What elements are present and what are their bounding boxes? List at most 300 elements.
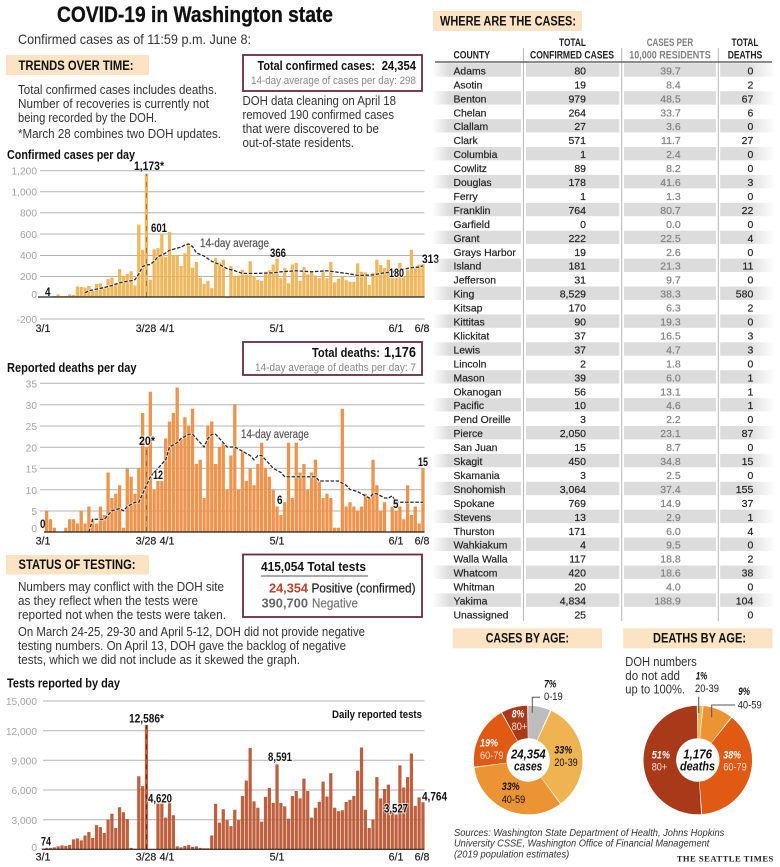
table rows: 0 bbox=[747, 414, 753, 426]
bar chart: tests reported by day: 12,000 bbox=[6, 727, 37, 738]
table rows: Adams bbox=[454, 66, 486, 77]
table rows: Wahkiakum bbox=[454, 541, 507, 552]
table rows: 1 bbox=[747, 386, 753, 398]
table rows: 171 bbox=[568, 526, 586, 538]
table rows: 21.3 bbox=[660, 261, 681, 273]
table rows: 104 bbox=[736, 596, 753, 608]
bar chart: confirmed cases per day: 14-day average bbox=[200, 238, 269, 250]
bar chart: reported deaths per day: 35 bbox=[26, 380, 37, 390]
table header bbox=[454, 37, 762, 61]
table rows: 37 bbox=[574, 330, 586, 342]
table rows: Grays Harbor bbox=[454, 248, 516, 259]
table rows: 3 bbox=[580, 470, 586, 482]
table rows: 170 bbox=[568, 303, 586, 315]
bar chart: confirmed cases per day: 0 bbox=[31, 290, 37, 301]
table rows: 2.9 bbox=[666, 512, 681, 524]
table rows: 0 bbox=[747, 121, 753, 133]
subtitle: Confirmed cases as of 11:59 p.m. June 8: bbox=[18, 31, 251, 47]
bar chart: confirmed cases per day: 4 bbox=[45, 287, 51, 299]
table rows: 4.6 bbox=[666, 400, 681, 412]
callout: total confirmed cases: 24,354 bbox=[382, 58, 417, 73]
table rows: Benton bbox=[454, 94, 487, 105]
text block: testing notes: reported not when the tests were taken. bbox=[18, 608, 226, 622]
table rows: 6.0 bbox=[666, 372, 681, 384]
text block: testing notes: as they reflect when the tests were bbox=[18, 594, 198, 608]
bar chart: confirmed cases per day: 3/1 bbox=[36, 323, 50, 335]
table rows: 33.7 bbox=[660, 107, 681, 119]
bar chart: confirmed cases per day: 3/28 bbox=[136, 323, 156, 335]
table: cases by county bbox=[432, 37, 775, 621]
table rows: 48.5 bbox=[660, 93, 681, 105]
bar chart: tests reported by day: Daily reported tests bbox=[332, 709, 422, 721]
sources: Sources: Washington State Department of Health, Johns Hopkins bbox=[454, 827, 725, 839]
text block: trends notes: *March 28 combines two DOH updates. bbox=[18, 127, 221, 141]
title: COVID-19 in Washington state bbox=[57, 2, 333, 27]
table rows: 19 bbox=[574, 247, 586, 259]
bar chart: tests reported by day: 3,527 bbox=[384, 804, 408, 816]
table rows: 37 bbox=[574, 344, 586, 356]
table rows: 41.6 bbox=[660, 177, 681, 189]
bar chart: tests reported by day: 6/8 bbox=[415, 852, 429, 864]
table rows: Kittitas bbox=[454, 318, 485, 328]
bar chart: reported deaths per day: 0 bbox=[31, 524, 37, 535]
table rows: 1 bbox=[747, 400, 753, 412]
table rows: 11.7 bbox=[661, 135, 681, 147]
table rows: 1.8 bbox=[666, 358, 681, 370]
table rows: Kitsap bbox=[454, 304, 483, 315]
text block: DOH data cleaning note: out-of-state residents. bbox=[242, 136, 354, 150]
bar chart: reported deaths per day: 20* bbox=[139, 436, 155, 448]
table rows: 1.3 bbox=[666, 191, 681, 203]
table rows: 188.9 bbox=[654, 596, 681, 608]
callout: total deaths: 1,176 bbox=[384, 344, 416, 361]
bar chart: confirmed cases per day: 313 bbox=[422, 254, 439, 266]
bar chart: reported deaths per day: 3/28 bbox=[136, 536, 156, 548]
table rows: Spokane bbox=[454, 499, 495, 510]
text block: trends notes: Number of recoveries is currently not bbox=[18, 97, 209, 111]
donut chart: cases by age: 80+ bbox=[512, 721, 527, 733]
bar chart: confirmed cases per day: 800 bbox=[20, 208, 37, 220]
bar chart: reported deaths per day: 0 bbox=[40, 519, 46, 531]
table rows: 34.8 bbox=[660, 456, 681, 468]
text block: DOH data cleaning note bbox=[242, 94, 396, 150]
table rows: 90 bbox=[574, 316, 586, 328]
table rows: 9.7 bbox=[666, 275, 681, 287]
bar chart: confirmed cases per day: 6/1 bbox=[389, 323, 403, 335]
sources: (2019 population estimates) bbox=[454, 848, 569, 860]
table rows: 39 bbox=[574, 372, 586, 384]
section heading: where are the cases: WHERE ARE THE CASES: bbox=[440, 14, 576, 29]
table rows: 0 bbox=[747, 65, 753, 77]
bar chart: confirmed cases per day: 601 bbox=[151, 223, 168, 235]
table rows: 0.0 bbox=[666, 219, 681, 231]
table rows: 0 bbox=[747, 358, 753, 370]
donut chart: deaths by age: 80+ bbox=[652, 762, 667, 774]
donut chart: deaths by age: 9% bbox=[738, 686, 750, 698]
section heading: status of testing: STATUS OF TESTING: bbox=[18, 557, 136, 572]
text block: trends notes: Total confirmed cases includes deaths. bbox=[18, 83, 217, 97]
table rows: 2 bbox=[747, 303, 753, 315]
bar chart: tests reported by day: 5/1 bbox=[270, 852, 284, 864]
table rows: 37 bbox=[742, 498, 753, 510]
donut chart: deaths by age bbox=[652, 670, 762, 798]
bar chart: reported deaths per day: 6/8 bbox=[415, 536, 429, 548]
bar chart: confirmed cases per day: 5/1 bbox=[270, 323, 284, 335]
text block: DOH numbers note: DOH numbers bbox=[625, 655, 697, 669]
donut chart: cases by age: 20-39 bbox=[554, 757, 578, 769]
bar chart: reported deaths per day: 20 bbox=[26, 444, 37, 454]
table rows: 13.1 bbox=[660, 386, 681, 398]
callout: total deaths: 14-day average of deaths per day: 7 bbox=[255, 362, 416, 374]
callout: total deaths bbox=[243, 342, 422, 375]
table rows: 3 bbox=[747, 330, 753, 342]
table rows: 222 bbox=[568, 233, 586, 245]
table rows: King bbox=[454, 290, 475, 301]
table rows: 4 bbox=[580, 540, 586, 552]
table rows: 1 bbox=[747, 372, 753, 384]
bar chart: tests reported by day: 6,000 bbox=[12, 786, 37, 797]
bar chart: tests reported by day: 15,000 bbox=[6, 697, 37, 708]
bar chart: reported deaths per day: 12 bbox=[153, 470, 163, 482]
sources bbox=[454, 827, 725, 860]
table rows: 420 bbox=[568, 568, 586, 580]
table rows: 3 bbox=[580, 414, 586, 426]
donut chart: cases by age bbox=[480, 679, 578, 806]
callout: total confirmed cases: Total confirmed cases: bbox=[258, 58, 375, 73]
callout: total confirmed cases: 14-day average of cases per day: 298 bbox=[251, 75, 416, 87]
bar chart: tests reported by day: 6/1 bbox=[389, 852, 403, 864]
section heading: trends over time bbox=[6, 55, 149, 75]
donut chart: deaths by age: 1,176 bbox=[683, 746, 713, 761]
bar chart: tests reported by day: 3/1 bbox=[36, 852, 50, 864]
table rows: 87 bbox=[742, 428, 753, 440]
bar chart: reported deaths per day: 4/1 bbox=[160, 536, 174, 548]
bar chart: confirmed cases per day: 180 bbox=[389, 268, 404, 280]
donut chart: cases by age: 24,354 bbox=[510, 746, 546, 761]
table rows: 450 bbox=[568, 456, 586, 468]
table rows bbox=[454, 65, 753, 621]
table rows: Stevens bbox=[454, 513, 491, 524]
text block: testing notes: On March 24-25, 29-30 and April 5-12, DOH did not provide negative bbox=[18, 625, 365, 639]
table rows: Columbia bbox=[454, 150, 498, 161]
callout: testing totals: 415,054 Total tests bbox=[261, 559, 366, 574]
bar chart: reported deaths per day: 5 bbox=[31, 507, 37, 518]
table rows: 18.6 bbox=[660, 568, 681, 580]
bar chart: confirmed cases per day: 4/1 bbox=[160, 323, 174, 335]
table rows: 769 bbox=[568, 498, 586, 510]
table rows: 3.6 bbox=[666, 121, 681, 133]
section heading: cases by age: CASES BY AGE: bbox=[486, 631, 569, 646]
table rows: Cowlitz bbox=[454, 164, 487, 175]
table header: TOTAL bbox=[559, 37, 586, 49]
text block: trends notes bbox=[18, 83, 221, 141]
bar chart: reported deaths per day bbox=[26, 380, 429, 548]
donut chart: cases by age: cases bbox=[514, 758, 542, 774]
bar chart: tests reported by day: 74 bbox=[41, 837, 51, 849]
bar chart: reported deaths per day: 6/1 bbox=[389, 536, 403, 548]
table rows: 31 bbox=[574, 275, 586, 287]
table rows: 571 bbox=[568, 135, 586, 147]
table rows: 0 bbox=[747, 582, 753, 594]
table rows: 10 bbox=[574, 400, 586, 412]
table rows: 8,529 bbox=[560, 289, 586, 301]
donut chart: deaths by age: 51% bbox=[652, 749, 670, 761]
table rows: Snohomish bbox=[454, 485, 506, 496]
table rows: Island bbox=[454, 262, 481, 273]
bar chart: confirmed cases per day: -200 bbox=[17, 315, 37, 326]
table rows: 2.2 bbox=[666, 414, 681, 426]
table rows: 38.3 bbox=[660, 289, 681, 301]
table rows: 18.8 bbox=[660, 554, 681, 566]
section heading: deaths by age bbox=[623, 628, 772, 648]
table rows: 0 bbox=[580, 219, 586, 231]
table rows: Pierce bbox=[454, 429, 483, 440]
table header: DEATHS bbox=[728, 49, 762, 61]
table rows: 2.4 bbox=[666, 149, 681, 161]
donut chart: cases by age: 19% bbox=[480, 738, 498, 750]
table rows: 2.5 bbox=[666, 470, 681, 482]
table rows: 20 bbox=[574, 582, 586, 594]
table rows: 0 bbox=[747, 247, 753, 259]
bar chart: tests reported by day: 4/1 bbox=[160, 852, 174, 864]
table rows: 0 bbox=[747, 609, 753, 621]
table rows: 22.5 bbox=[660, 233, 681, 245]
section heading: deaths by age: DEATHS BY AGE: bbox=[653, 631, 746, 646]
text block: DOH data cleaning note: that were discovered to be bbox=[242, 122, 379, 136]
sources: University CSSE, Washington Office of Financial Management bbox=[454, 838, 710, 850]
table rows: 0 bbox=[747, 149, 753, 161]
table rows: Okanogan bbox=[454, 387, 502, 398]
table rows: 0 bbox=[747, 219, 753, 231]
table rows: 23.1 bbox=[660, 428, 681, 440]
callout: testing totals: 390,700 bbox=[262, 596, 308, 611]
callout: testing totals: Negative bbox=[312, 597, 358, 611]
bar chart: confirmed cases per day bbox=[12, 161, 439, 335]
table rows: 0 bbox=[747, 316, 753, 328]
table rows: 1 bbox=[580, 149, 586, 161]
callout: testing totals: Positive (confirmed) bbox=[312, 582, 416, 596]
table header: COUNTY bbox=[454, 49, 491, 61]
table rows: 0 bbox=[747, 275, 753, 287]
table rows: Clark bbox=[454, 136, 479, 147]
bar chart: confirmed cases per day: 1,173* bbox=[134, 161, 164, 173]
table rows: Ferry bbox=[454, 192, 479, 203]
table rows: 19 bbox=[574, 79, 586, 91]
table rows: Unassigned bbox=[454, 610, 509, 621]
table rows: 4.7 bbox=[666, 344, 681, 356]
table rows: 2 bbox=[580, 358, 586, 370]
table rows: 264 bbox=[568, 107, 586, 119]
table rows: 181 bbox=[568, 261, 586, 273]
table rows: 67 bbox=[742, 93, 753, 105]
table rows: Walla Walla bbox=[454, 555, 508, 566]
bar chart: reported deaths per day: 25 bbox=[26, 422, 37, 433]
table rows: 80.7 bbox=[660, 205, 681, 217]
donut chart: cases by age: 40-59 bbox=[502, 794, 525, 806]
text block: DOH numbers note: do not add bbox=[625, 669, 680, 683]
table rows: 2 bbox=[747, 79, 753, 91]
table rows: 3 bbox=[747, 177, 753, 189]
table rows: 6 bbox=[747, 107, 753, 119]
table rows: 178 bbox=[568, 177, 586, 189]
table rows: 8.2 bbox=[666, 163, 681, 175]
callout: total deaths: Total deaths: bbox=[312, 345, 380, 360]
bar chart: confirmed cases per day: 200 bbox=[20, 272, 37, 283]
donut chart: deaths by age: deaths bbox=[680, 759, 715, 774]
table rows: 1 bbox=[747, 512, 753, 524]
bar chart: tests reported by day: 12,586* bbox=[129, 714, 164, 726]
callout: testing totals: 24,354 bbox=[269, 581, 309, 596]
bar chart: confirmed cases per day: 1,000 bbox=[12, 188, 37, 198]
donut chart: cases by age: 60-79 bbox=[480, 750, 504, 762]
section heading: trends over time: TRENDS OVER TIME: bbox=[18, 58, 134, 73]
table rows: 39.7 bbox=[660, 65, 681, 77]
table header: 10,000 RESIDENTS bbox=[629, 49, 711, 61]
table rows: 80 bbox=[574, 65, 586, 77]
bar chart: tests reported by day: 4,764 bbox=[422, 792, 448, 804]
bar chart: tests reported by day: 4,620 bbox=[148, 794, 172, 806]
bar chart: tests reported by day bbox=[6, 697, 448, 864]
table rows: 8.4 bbox=[666, 79, 681, 91]
bar chart: confirmed cases per day: 366 bbox=[270, 248, 286, 260]
table rows: Jefferson bbox=[454, 276, 496, 287]
table rows: Chelan bbox=[454, 108, 487, 119]
donut chart: cases by age: 33% bbox=[502, 781, 520, 793]
text block: DOH data cleaning note: removed 190 confirmed cases bbox=[242, 108, 394, 122]
table rows: Yakima bbox=[454, 596, 488, 608]
table rows: 4,834 bbox=[560, 596, 586, 608]
chart heading: confirmed cases per day: Confirmed cases per day bbox=[7, 148, 135, 162]
table header: CASES PER bbox=[647, 37, 693, 49]
bar chart: tests reported by day: 0 bbox=[31, 843, 37, 854]
table rows: Franklin bbox=[454, 206, 491, 217]
donut chart: deaths by age: 1% bbox=[696, 670, 707, 682]
table header: TOTAL bbox=[732, 37, 759, 49]
table rows: Skagit bbox=[454, 457, 482, 468]
table rows: 3,064 bbox=[560, 484, 586, 496]
text block: DOH numbers note: up to 100%. bbox=[625, 682, 685, 696]
table header: CONFIRMED CASES bbox=[530, 49, 614, 61]
table rows: Pend Oreille bbox=[454, 415, 511, 426]
table rows: Skamania bbox=[454, 471, 500, 482]
section heading: status of testing bbox=[6, 555, 149, 574]
bar chart: tests reported by day: 8,591 bbox=[268, 752, 293, 764]
table rows: 0 bbox=[747, 191, 753, 203]
table rows: Clallam bbox=[454, 122, 488, 133]
table rows: 2.6 bbox=[666, 247, 681, 259]
donut chart: cases by age: 7% bbox=[544, 679, 557, 691]
section heading: cases by age bbox=[453, 628, 602, 648]
table rows: 16.5 bbox=[660, 330, 681, 342]
bar chart: reported deaths per day: 5/1 bbox=[270, 536, 284, 548]
table rows: 2 bbox=[747, 554, 753, 566]
bar chart: reported deaths per day: 5 bbox=[393, 499, 399, 511]
table rows: 14.9 bbox=[660, 498, 681, 510]
table rows: 0 bbox=[747, 163, 753, 175]
bar chart: reported deaths per day: 14-day average bbox=[241, 429, 309, 441]
table rows: Asotin bbox=[454, 80, 483, 91]
callout: testing totals bbox=[243, 554, 422, 617]
donut chart: deaths by age: 20-39 bbox=[695, 683, 719, 695]
table rows: 8.7 bbox=[666, 442, 681, 454]
bar chart: reported deaths per day: 6 bbox=[277, 495, 282, 507]
text block: trends notes: being recorded by the DOH. bbox=[18, 111, 157, 125]
table rows: 979 bbox=[568, 93, 586, 105]
table rows: 19.3 bbox=[660, 316, 681, 328]
table rows: 15 bbox=[574, 442, 586, 454]
bar chart: tests reported by day: 3/28 bbox=[136, 852, 156, 864]
table rows: 6.0 bbox=[666, 526, 681, 538]
bar chart: reported deaths per day: 15 bbox=[26, 464, 37, 476]
bar chart: confirmed cases per day: 400 bbox=[20, 251, 37, 262]
text block: testing notes bbox=[18, 580, 365, 667]
table rows: 11 bbox=[742, 261, 753, 273]
donut chart: cases by age: 0-19 bbox=[544, 691, 563, 703]
credit: The Seattle Times: THE SEATTLE TIMES bbox=[677, 854, 774, 864]
bar chart: confirmed cases per day: 600 bbox=[20, 230, 37, 241]
text block: DOH numbers note bbox=[625, 655, 697, 696]
donut chart: cases by age: 8% bbox=[512, 709, 524, 721]
section heading: where are the cases bbox=[433, 11, 582, 31]
table rows: 580 bbox=[736, 289, 753, 301]
table rows: 0 bbox=[747, 540, 753, 552]
table rows: Lincoln bbox=[454, 359, 487, 370]
table rows: 27 bbox=[742, 135, 753, 147]
table rows: 38 bbox=[742, 568, 753, 580]
table rows: 37.4 bbox=[660, 484, 681, 496]
bar chart: reported deaths per day: 30 bbox=[26, 401, 37, 412]
bar chart: confirmed cases per day: 1,200 bbox=[12, 166, 37, 178]
table rows: Whatcom bbox=[454, 569, 497, 580]
table rows: Garfield bbox=[454, 220, 490, 231]
text block: DOH data cleaning note: DOH data cleaning on April 18 bbox=[242, 94, 396, 108]
table rows: 0 bbox=[747, 470, 753, 482]
table rows: 4 bbox=[747, 233, 753, 245]
text block: testing notes: tests, which we did not include as it skewed the graph. bbox=[18, 653, 300, 667]
table rows: San Juan bbox=[454, 443, 498, 454]
table rows: 4 bbox=[747, 526, 753, 538]
table rows: 4.0 bbox=[666, 582, 681, 594]
donut chart: deaths by age: 60-79 bbox=[723, 762, 747, 774]
table rows: 117 bbox=[569, 554, 586, 566]
table rows: 3 bbox=[747, 344, 753, 356]
table rows: Klickitat bbox=[454, 331, 489, 342]
table rows: Douglas bbox=[454, 178, 492, 189]
donut chart: cases by age: 33% bbox=[554, 744, 572, 756]
table rows: 15 bbox=[742, 456, 753, 468]
table rows: Pacific bbox=[454, 401, 484, 412]
donut chart: deaths by age: 40-59 bbox=[738, 699, 762, 711]
table rows: Whitman bbox=[454, 583, 495, 594]
table rows: 155 bbox=[736, 484, 753, 496]
table rows: 27 bbox=[574, 121, 586, 133]
table rows: Thurston bbox=[454, 527, 495, 538]
bar chart: reported deaths per day: 15 bbox=[418, 457, 428, 469]
donut chart: deaths by age: 38% bbox=[723, 749, 741, 761]
table rows: 0 bbox=[747, 442, 753, 454]
table rows: Lewis bbox=[454, 345, 480, 356]
table rows: 2,050 bbox=[560, 428, 586, 440]
bar chart: tests reported by day: 9,000 bbox=[12, 756, 37, 768]
bar chart: tests reported by day: 3,000 bbox=[12, 816, 37, 827]
table rows: 6.3 bbox=[666, 303, 681, 315]
table rows: 89 bbox=[574, 163, 586, 175]
table rows: 1 bbox=[580, 191, 586, 203]
table rows: 22 bbox=[742, 205, 753, 217]
chart heading: tests reported by day: Tests reported by day bbox=[7, 677, 120, 691]
table rows: 764 bbox=[568, 205, 586, 217]
table rows: Grant bbox=[454, 234, 480, 245]
